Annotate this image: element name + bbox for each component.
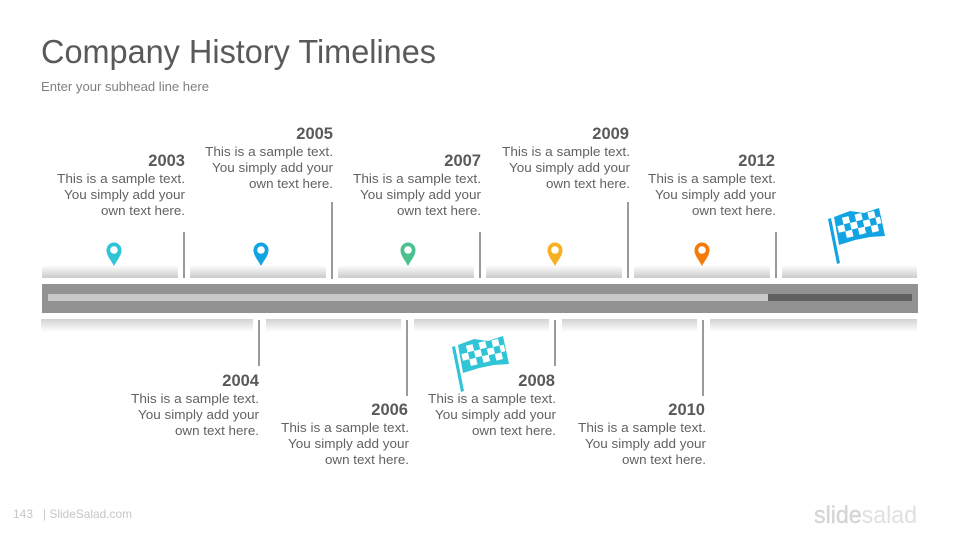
subhead: Enter your subhead line here	[41, 79, 209, 94]
connector lines	[183, 202, 777, 396]
milestone 2009: You simply add your	[509, 160, 631, 175]
icon: pin 2005	[254, 243, 268, 266]
milestone 2003	[57, 152, 186, 218]
icon: teal checkered flag	[452, 336, 509, 392]
milestone 2005: own text here.	[249, 176, 333, 191]
footer: page number: 143	[13, 507, 33, 521]
progress: completed	[48, 294, 768, 301]
milestone 2009: This is a sample text.	[502, 144, 630, 159]
milestone 2010	[578, 401, 707, 467]
milestone 2003: 2003	[148, 152, 185, 170]
footer: site name: | SlideSalad.com	[43, 507, 132, 521]
milestone 2007: You simply add your	[360, 187, 482, 202]
timeline bar	[42, 284, 918, 313]
milestone 2008	[428, 372, 557, 438]
milestone 2007: own text here.	[397, 203, 481, 218]
milestone 2009: own text here.	[546, 176, 630, 191]
upper shelf segments	[42, 265, 917, 278]
lower shelf segments	[41, 319, 917, 332]
milestone 2004: You simply add your	[138, 407, 260, 422]
icon: pin 2012	[694, 243, 710, 266]
milestone 2004: own text here.	[175, 423, 259, 438]
milestone 2003: You simply add your	[64, 187, 186, 202]
milestone 2006: own text here.	[325, 452, 409, 467]
milestone 2008: This is a sample text.	[428, 391, 556, 406]
milestone 2003: own text here.	[101, 203, 185, 218]
milestone 2008: 2008	[518, 372, 555, 390]
milestone 2004: 2004	[222, 372, 260, 390]
milestone 2006: 2006	[371, 401, 408, 419]
milestone 2012: own text here.	[692, 203, 776, 218]
milestone 2012	[648, 152, 777, 218]
milestone 2006: This is a sample text.	[281, 420, 409, 435]
icon: pin 2003	[106, 243, 122, 266]
milestone 2010: 2010	[668, 401, 705, 419]
milestone 2006	[281, 401, 410, 467]
milestone 2005: 2005	[296, 125, 333, 143]
milestone 2006: You simply add your	[288, 436, 410, 451]
milestone 2004	[131, 372, 260, 438]
milestone 2008: own text here.	[472, 423, 556, 438]
icon: pin 2009	[548, 243, 562, 266]
milestone 2004: This is a sample text.	[131, 391, 259, 406]
milestone 2005: You simply add your	[212, 160, 334, 175]
milestone 2005	[205, 125, 334, 191]
milestone 2012: This is a sample text.	[648, 171, 776, 186]
milestone 2007	[353, 152, 482, 218]
icon: blue checkered flag	[828, 208, 885, 264]
milestone 2010: own text here.	[622, 452, 706, 467]
milestone 2010: You simply add your	[585, 436, 707, 451]
progress: remaining	[768, 294, 912, 301]
icon: pin 2007	[400, 243, 416, 266]
milestone 2009: 2009	[592, 125, 629, 143]
milestone 2012: You simply add your	[655, 187, 777, 202]
milestone 2005: This is a sample text.	[205, 144, 333, 159]
logo: slidesalad	[814, 502, 917, 529]
milestone 2012: 2012	[738, 152, 775, 170]
milestone 2007: This is a sample text.	[353, 171, 481, 186]
milestone 2003: This is a sample text.	[57, 171, 185, 186]
milestone 2009	[502, 125, 631, 191]
title: Company History Timelines	[41, 34, 436, 71]
milestone 2007: 2007	[444, 152, 481, 170]
milestone 2010: This is a sample text.	[578, 420, 706, 435]
milestone 2008: You simply add your	[435, 407, 557, 422]
